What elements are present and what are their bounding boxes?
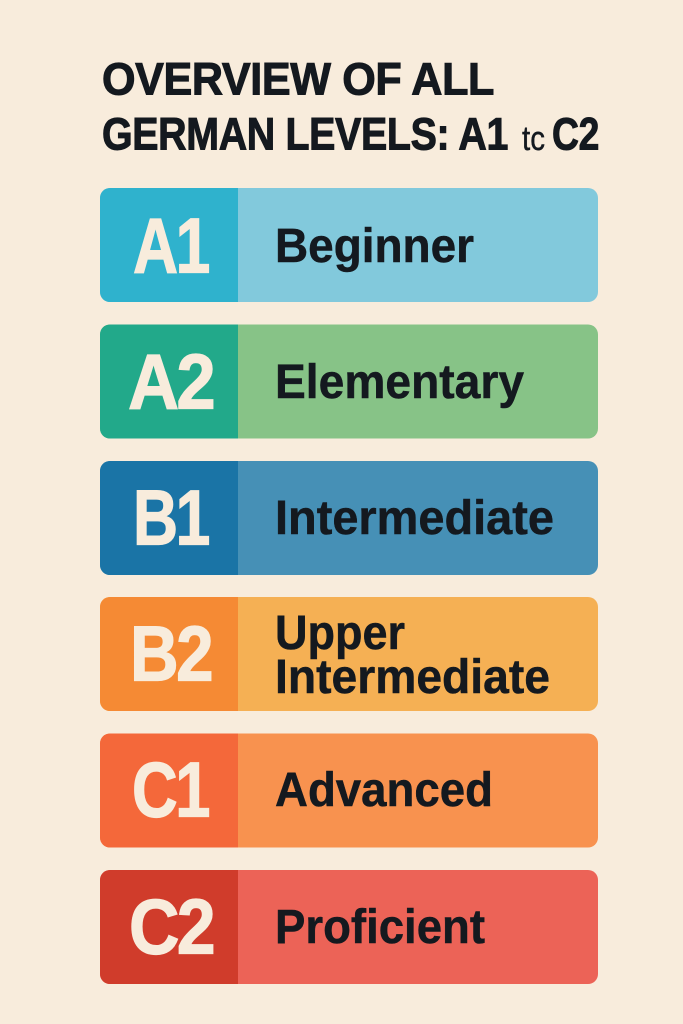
title: C2 (552, 108, 599, 160)
panel: B2 Upper Intermediate (100, 597, 598, 711)
panel: B2 Upper Intermediate: Upper (275, 607, 405, 660)
title (102, 54, 599, 160)
panel: B2 Upper Intermediate: B2 (130, 610, 212, 698)
panel: C2 Proficient: Proficient (275, 901, 485, 954)
panel: C2 Proficient: C2 (129, 882, 214, 970)
panel: B1 Intermediate: B1 (133, 474, 209, 562)
panel: C2 Proficient (100, 870, 598, 984)
panel: A1 Beginner: Beginner (275, 220, 474, 273)
panel: A2 Elementary: A2 (128, 338, 214, 426)
panel: A2 Elementary: Elementary (275, 356, 524, 409)
panel: B1 Intermediate (100, 461, 598, 575)
panel: A2 Elementary (100, 324, 598, 438)
panel: B1 Intermediate: Intermediate (275, 492, 554, 545)
panel: B2 Upper Intermediate: Intermediate (275, 651, 550, 704)
panel: C1 Advanced (100, 734, 598, 848)
title: GERMAN LEVELS: A1 (102, 108, 508, 160)
panel: A1 Beginner (100, 188, 598, 302)
panel: C1 Advanced: Advanced (275, 764, 493, 817)
title: tc (522, 120, 545, 158)
title: OVERVIEW OF ALL (102, 54, 494, 104)
panel: A1 Beginner: A1 (133, 202, 209, 290)
panel: C1 Advanced: C1 (132, 746, 209, 834)
